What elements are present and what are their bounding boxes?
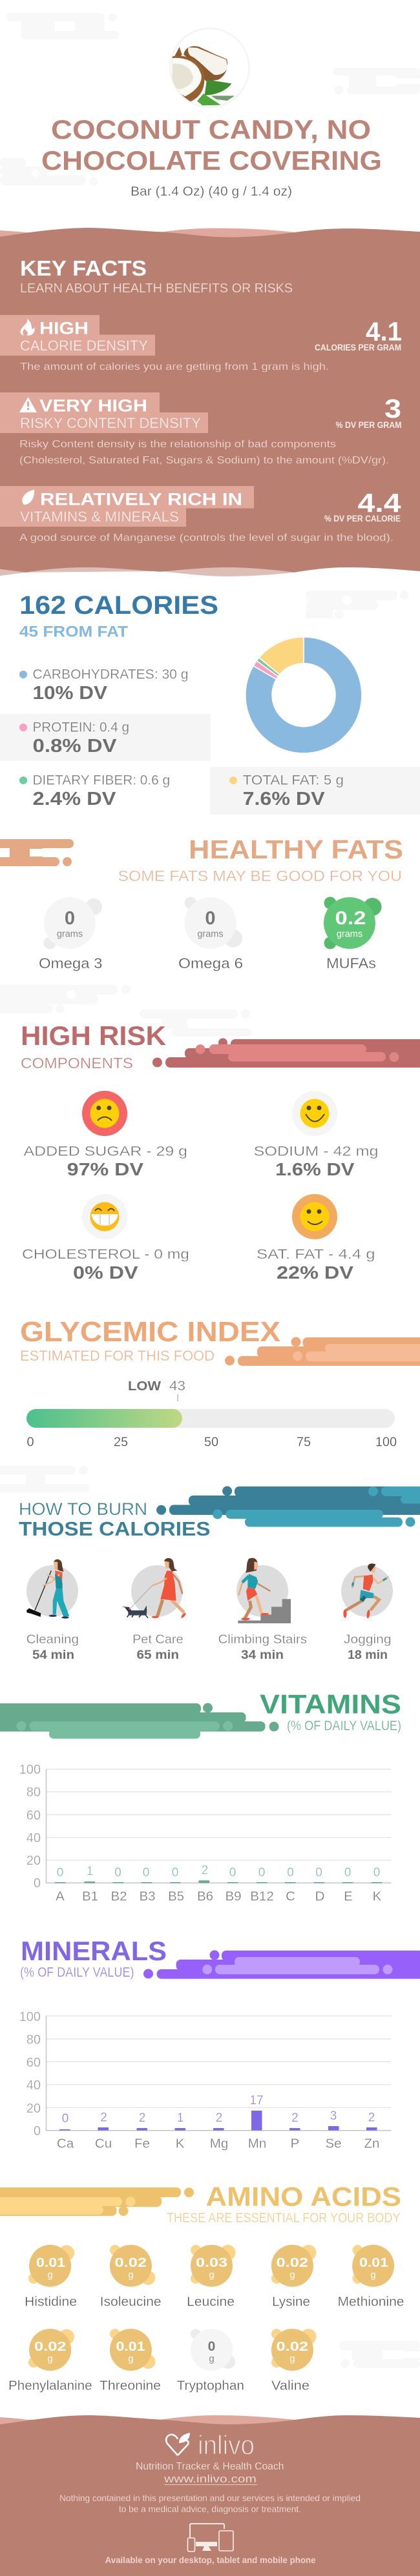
amino: tryptophan: g [209, 2353, 215, 2364]
bar chart: minerals: 17 [249, 2094, 264, 2107]
icon: grinning face [82, 1194, 127, 1239]
logo: inlivo: inlivo [198, 2430, 255, 2460]
amino: leucine: 0.03 [196, 2256, 227, 2270]
fat: omega 3 [39, 897, 102, 971]
legend: total fat: TOTAL FAT: 5 g [243, 773, 344, 788]
food image: coconut in ring [170, 28, 249, 107]
panel: footer [0, 2415, 420, 2576]
label: vitamins and minerals: VITAMINS & MINERALS [20, 509, 179, 525]
amino: threonine: g [128, 2353, 134, 2364]
bar chart: minerals: Cu [95, 2136, 112, 2151]
risk: saturated fat [257, 1194, 375, 1283]
bar chart: minerals: 2 [100, 2111, 107, 2125]
legend: carbohydrates: 10% DV [32, 683, 108, 704]
icon: woman on stairs [238, 1558, 291, 1623]
risk: added sugar: 97% DV [67, 1159, 143, 1179]
panel: glycemic index [20, 1316, 420, 1450]
gauge value label: 43 [169, 1379, 185, 1394]
amino: isoleucine [100, 2245, 162, 2309]
panel: minerals [19, 1936, 420, 2151]
background blob: top left [6, 13, 119, 39]
logo: inlivo [166, 2430, 255, 2460]
amino: isoleucine: g [128, 2269, 134, 2280]
decorative blob: minerals [143, 1951, 420, 1979]
fat: mufas [324, 897, 381, 971]
bar chart: minerals: 3 [330, 2109, 337, 2123]
panel: healthy fats [0, 835, 403, 971]
icon: smiling face [292, 1091, 337, 1136]
decorative blob: vitamins [0, 1703, 279, 1739]
amino: threonine: Threonine [100, 2379, 161, 2393]
description: Risky Content density is the relationship of bad components [19, 439, 336, 450]
amino: tryptophan [177, 2329, 244, 2393]
bar chart: minerals: 2 [139, 2111, 145, 2125]
fact: calorie density [0, 315, 402, 372]
availability note: Available on your desktop, tablet and mobile phone [105, 2555, 316, 2565]
gauge bar [26, 1409, 395, 1428]
bar chart: vitamins: E [344, 1889, 353, 1903]
legend: dietary fiber: DIETARY FIBER: 0.6 g [32, 773, 170, 788]
amino: histidine: 0.01 [36, 2256, 65, 2270]
high risk heading: HIGH RISK [21, 1020, 166, 1051]
donut chart [246, 637, 362, 753]
fact: vitamins and minerals [0, 486, 401, 543]
icon: heart with leaf [166, 2433, 190, 2455]
bar chart: vitamins: 0 [57, 1866, 63, 1880]
icon: woman with broom [26, 1559, 69, 1619]
bar chart: minerals: 0 [34, 2124, 41, 2138]
value: 4.4: 4.4 [358, 488, 401, 518]
amino: lysine: Lysine [272, 2295, 310, 2309]
risk: cholesterol [22, 1194, 189, 1283]
bar chart: vitamins: C [286, 1889, 295, 1903]
icon: flame [21, 319, 35, 336]
gauge scale: 75 [297, 1435, 311, 1450]
bar chart: minerals: 1 [177, 2111, 184, 2125]
risk: sodium: SODIUM - 42 mg [254, 1144, 379, 1159]
legend: carbohydrates: CARBOHYDRATES: 30 g [32, 667, 189, 682]
bar chart: minerals: 2 [368, 2111, 375, 2125]
bar chart: minerals: Fe [134, 2136, 150, 2151]
amino: methionine: g [370, 2269, 376, 2280]
amino: phenylalanine: 0.02 [34, 2340, 66, 2354]
bar chart: vitamins: 20 [26, 1854, 41, 1868]
amino: histidine: Histidine [25, 2295, 77, 2309]
high risk subheading: COMPONENTS [21, 1055, 133, 1071]
bar chart: vitamins: B12 [250, 1889, 274, 1903]
fat: omega 3: Omega 3 [39, 955, 102, 971]
key facts subheading: LEARN ABOUT HEALTH BENEFITS OR RISKS [20, 281, 293, 296]
bar chart: minerals: P [291, 2136, 299, 2151]
value: 4.1: 4.1 [366, 316, 402, 346]
icon: devices [187, 2524, 233, 2551]
amino: methionine: 0.01 [359, 2256, 388, 2270]
fat: omega 6: 0 [205, 908, 216, 929]
gauge scale: 0 [26, 1435, 34, 1450]
title: CHOCOLATE COVERING [41, 145, 382, 176]
background blob: calories [306, 591, 409, 619]
panel: amino acids [0, 2182, 404, 2393]
amino: threonine [100, 2329, 161, 2393]
amino: tryptophan: 0 [208, 2339, 215, 2354]
amino: tryptophan: Tryptophan [177, 2379, 244, 2393]
key facts heading: KEY FACTS [20, 256, 147, 280]
activity: cleaning [26, 1559, 79, 1662]
bar chart: minerals: 2 [216, 2111, 222, 2125]
website link: www.inlivo.com [163, 2473, 257, 2485]
amino: histidine [25, 2245, 77, 2309]
amino: leucine: Leucine [187, 2295, 235, 2309]
gauge scale: 50 [204, 1435, 218, 1450]
serving size subtitle: Bar (1.4 Oz) (40 g / 1.4 oz) [131, 185, 292, 199]
panel: key facts [0, 228, 420, 576]
glycemic heading: GLYCEMIC INDEX [20, 1316, 280, 1348]
bar chart: vitamins: 0 [344, 1866, 351, 1880]
fat: omega 3: 0 [65, 908, 75, 929]
risk: added sugar: ADDED SUGAR - 29 g [23, 1144, 187, 1159]
activity: pet care [121, 1558, 187, 1662]
amino: leucine [187, 2245, 235, 2309]
bar chart: vitamins: 0 [229, 1866, 236, 1880]
panel: calories [0, 591, 420, 815]
amino: lysine [271, 2245, 317, 2309]
bar chart: minerals: 0 [62, 2112, 68, 2125]
rating: very high: VERY HIGH [39, 396, 147, 416]
bar chart: minerals: 40 [26, 2078, 41, 2093]
panel: vitamins [0, 1689, 401, 1903]
bar chart: vitamins: B9 [225, 1889, 242, 1903]
amino: histidine: g [47, 2269, 53, 2280]
bar chart: vitamins: 0 [172, 1866, 178, 1880]
activity: cleaning: 54 min [32, 1648, 74, 1662]
background blob: high risk middle [140, 1009, 252, 1037]
amino: leucine: g [209, 2269, 215, 2280]
fat: omega 6: grams [197, 929, 224, 940]
decorative blob: burn [156, 1486, 420, 1527]
gauge scale: 100 [375, 1435, 397, 1450]
disclaimer: to be a medical advice, diagnosis or treatment. [119, 2504, 301, 2514]
gauge value label: LOW [128, 1379, 161, 1394]
legend: dietary fiber [19, 773, 170, 809]
bar chart: vitamins: B3 [139, 1889, 156, 1903]
amino acids heading: AMINO ACIDS [205, 2182, 401, 2212]
amino: phenylalanine: Phenylalanine [8, 2379, 92, 2393]
icon: woman walking dog [121, 1558, 187, 1619]
description: (Cholesterol, Saturated Fat, Sugars & Sodium) to the amount (%DV/gr). [19, 455, 389, 466]
activity: cleaning: Cleaning [26, 1632, 79, 1647]
rating: high: HIGH [39, 319, 89, 338]
fat: omega 6 [178, 897, 243, 971]
bar chart: minerals: 100 [19, 2010, 41, 2024]
bar chart: minerals: 60 [26, 2056, 41, 2070]
activity: climbing stairs: Climbing Stairs [218, 1632, 307, 1647]
icon: sad face [82, 1091, 127, 1136]
bar chart: vitamins: 80 [26, 1785, 41, 1800]
bar chart: vitamins: 0 [315, 1866, 322, 1880]
amino: valine: Valine [271, 2379, 310, 2393]
legend: total fat: 7.6% DV [243, 789, 325, 809]
fact: risky content density [0, 392, 402, 466]
legend: dietary fiber: 2.4% DV [32, 789, 116, 809]
bar chart: vitamins: 1 [87, 1865, 93, 1878]
bar chart: vitamins [19, 1763, 392, 1903]
bar chart: vitamins: 2 [202, 1864, 208, 1878]
healthy fats subheading: SOME FATS MAY BE GOOD FOR YOU [118, 867, 402, 884]
bar chart: vitamins: 40 [26, 1831, 41, 1845]
icon: mild smile face [292, 1194, 337, 1239]
risk: cholesterol: CHOLESTEROL - 0 mg [22, 1247, 189, 1262]
risk: saturated fat: 22% DV [277, 1263, 353, 1283]
bar chart: vitamins: 100 [19, 1763, 41, 1777]
minerals subheading: (% OF DAILY VALUE) [20, 1965, 134, 1980]
activity: jogging [341, 1563, 393, 1662]
burn heading line 1: HOW TO BURN [19, 1499, 147, 1519]
risk: cholesterol: 0% DV [73, 1263, 138, 1283]
bar chart: vitamins: 0 [258, 1866, 265, 1880]
amino: valine: 0.02 [277, 2340, 308, 2354]
bar chart: vitamins: B5 [168, 1889, 184, 1903]
amino: lysine: 0.02 [277, 2256, 308, 2270]
risk: saturated fat: SAT. FAT - 4.4 g [257, 1247, 375, 1262]
gauge scale: 25 [114, 1435, 128, 1450]
bar chart: minerals: K [176, 2136, 185, 2151]
activity: jogging: Jogging [344, 1632, 392, 1647]
unit: dv per gram: % DV PER GRAM [336, 420, 402, 430]
bar chart: minerals: 20 [26, 2102, 41, 2116]
title: COCONUT CANDY, NO [51, 114, 371, 145]
icon: jogger [343, 1563, 389, 1619]
fat: mufas: MUFAs [326, 955, 376, 971]
burn heading line 2: THOSE CALORIES [19, 1517, 211, 1540]
amino: valine: g [289, 2353, 295, 2364]
risk: sodium [254, 1091, 379, 1179]
label: calorie density: CALORIE DENSITY [20, 338, 148, 354]
fat: omega 6: Omega 6 [178, 955, 243, 971]
amino: phenylalanine: g [47, 2353, 53, 2364]
amino: lysine: g [289, 2269, 295, 2280]
description [19, 439, 389, 466]
background blob: amino right [339, 2341, 420, 2368]
risk: added sugar [23, 1091, 187, 1179]
bar chart: minerals: Mn [248, 2136, 266, 2151]
fat: mufas: 0.2 [335, 908, 366, 929]
bar chart: minerals: Mg [210, 2136, 228, 2151]
bar chart: minerals: Se [325, 2136, 342, 2151]
bar chart: minerals: 80 [26, 2033, 41, 2047]
description: A good source of Manganese (controls the level of sugar in the blood). [19, 532, 394, 543]
value: 3: 3 [384, 394, 401, 423]
amino: phenylalanine [8, 2329, 92, 2393]
bar chart: vitamins: B1 [82, 1889, 98, 1903]
legend: protein: PROTEIN: 0.4 g [32, 720, 129, 735]
bar chart: vitamins: D [315, 1889, 324, 1903]
icon: warning triangle [19, 397, 37, 412]
bar chart: vitamins: B2 [110, 1889, 127, 1903]
activity: pet care: 65 min [137, 1648, 179, 1662]
rating: relatively rich in: RELATIVELY RICH IN [40, 489, 242, 509]
activity: climbing stairs [218, 1558, 307, 1662]
panel: high risk [21, 1020, 420, 1283]
bar chart: minerals [19, 2010, 392, 2151]
amino: methionine [337, 2245, 404, 2309]
glycemic subheading: ESTIMATED FOR THIS FOOD [20, 1348, 215, 1364]
minerals heading: MINERALS [21, 1936, 167, 1966]
bar chart: vitamins: 0 [114, 1866, 121, 1880]
calories from fat: 45 FROM FAT [19, 624, 128, 641]
decorative blob: healthy fats [0, 839, 74, 866]
background blob: high risk left [0, 985, 131, 1013]
bar chart: minerals: 2 [291, 2111, 299, 2125]
label: risky content density: RISKY CONTENT DENSITY [20, 415, 201, 431]
amino: isoleucine: 0.02 [115, 2256, 147, 2270]
legend: protein: 0.8% DV [32, 736, 117, 756]
activity: jogging: 18 min [348, 1648, 388, 1662]
bar chart: vitamins: 0 [143, 1866, 149, 1880]
disclaimer [59, 2493, 361, 2514]
fat: omega 3: grams [57, 929, 83, 940]
vitamins heading: VITAMINS [260, 1689, 401, 1719]
amino: isoleucine: Isoleucine [100, 2295, 162, 2309]
vitamins subheading: (% OF DAILY VALUE) [287, 1719, 401, 1734]
calories heading: 162 CALORIES [19, 591, 218, 620]
activity: pet care: Pet Care [132, 1632, 184, 1647]
panel: burn calories [19, 1486, 420, 1662]
bar chart: vitamins: K [373, 1889, 382, 1903]
background blob: top right [333, 68, 420, 94]
legend: total fat [210, 767, 420, 815]
legend: protein [0, 714, 211, 761]
decorative blob: high risk [152, 1038, 420, 1068]
decorative blob: amino acids [0, 2187, 194, 2216]
amino: threonine: 0.01 [116, 2340, 145, 2354]
amino: valine [271, 2329, 317, 2393]
unit: dv per calorie: % DV PER CALORIE [324, 514, 401, 523]
bar chart: vitamins: B6 [197, 1889, 213, 1903]
description: The amount of calories you are getting from 1 gram is high. [20, 361, 329, 372]
gauge value label [128, 1379, 185, 1401]
activity: climbing stairs: 34 min [241, 1648, 284, 1662]
icon: leaf [22, 489, 34, 505]
decorative blob: glycemic [225, 1337, 420, 1366]
healthy fats heading: HEALTHY FATS [189, 835, 403, 864]
amino: methionine: Methionine [337, 2295, 404, 2309]
unit: calories per gram: CALORIES PER GRAM [315, 343, 401, 352]
title [41, 114, 382, 176]
legend: carbohydrates [19, 667, 189, 704]
bar chart: minerals: Ca [57, 2136, 74, 2151]
bar chart: vitamins: 0 [287, 1866, 294, 1880]
bar chart: vitamins: A [56, 1889, 65, 1903]
background blob: title left [0, 158, 98, 186]
gauge scale [26, 1435, 397, 1450]
background blob: burn [0, 1466, 90, 1492]
bar chart: vitamins: 0 [34, 1876, 41, 1891]
tagline: Nutrition Tracker & Health Coach [136, 2461, 284, 2472]
bar chart: vitamins: 60 [26, 1809, 41, 1823]
bar chart: vitamins: 0 [373, 1866, 380, 1880]
disclaimer: Nothing contained in this presentation and our services is intended or implied [59, 2493, 361, 2503]
bar chart: minerals: Zn [364, 2136, 379, 2151]
risk: sodium: 1.6% DV [275, 1159, 355, 1179]
fat: mufas: grams [337, 929, 362, 940]
